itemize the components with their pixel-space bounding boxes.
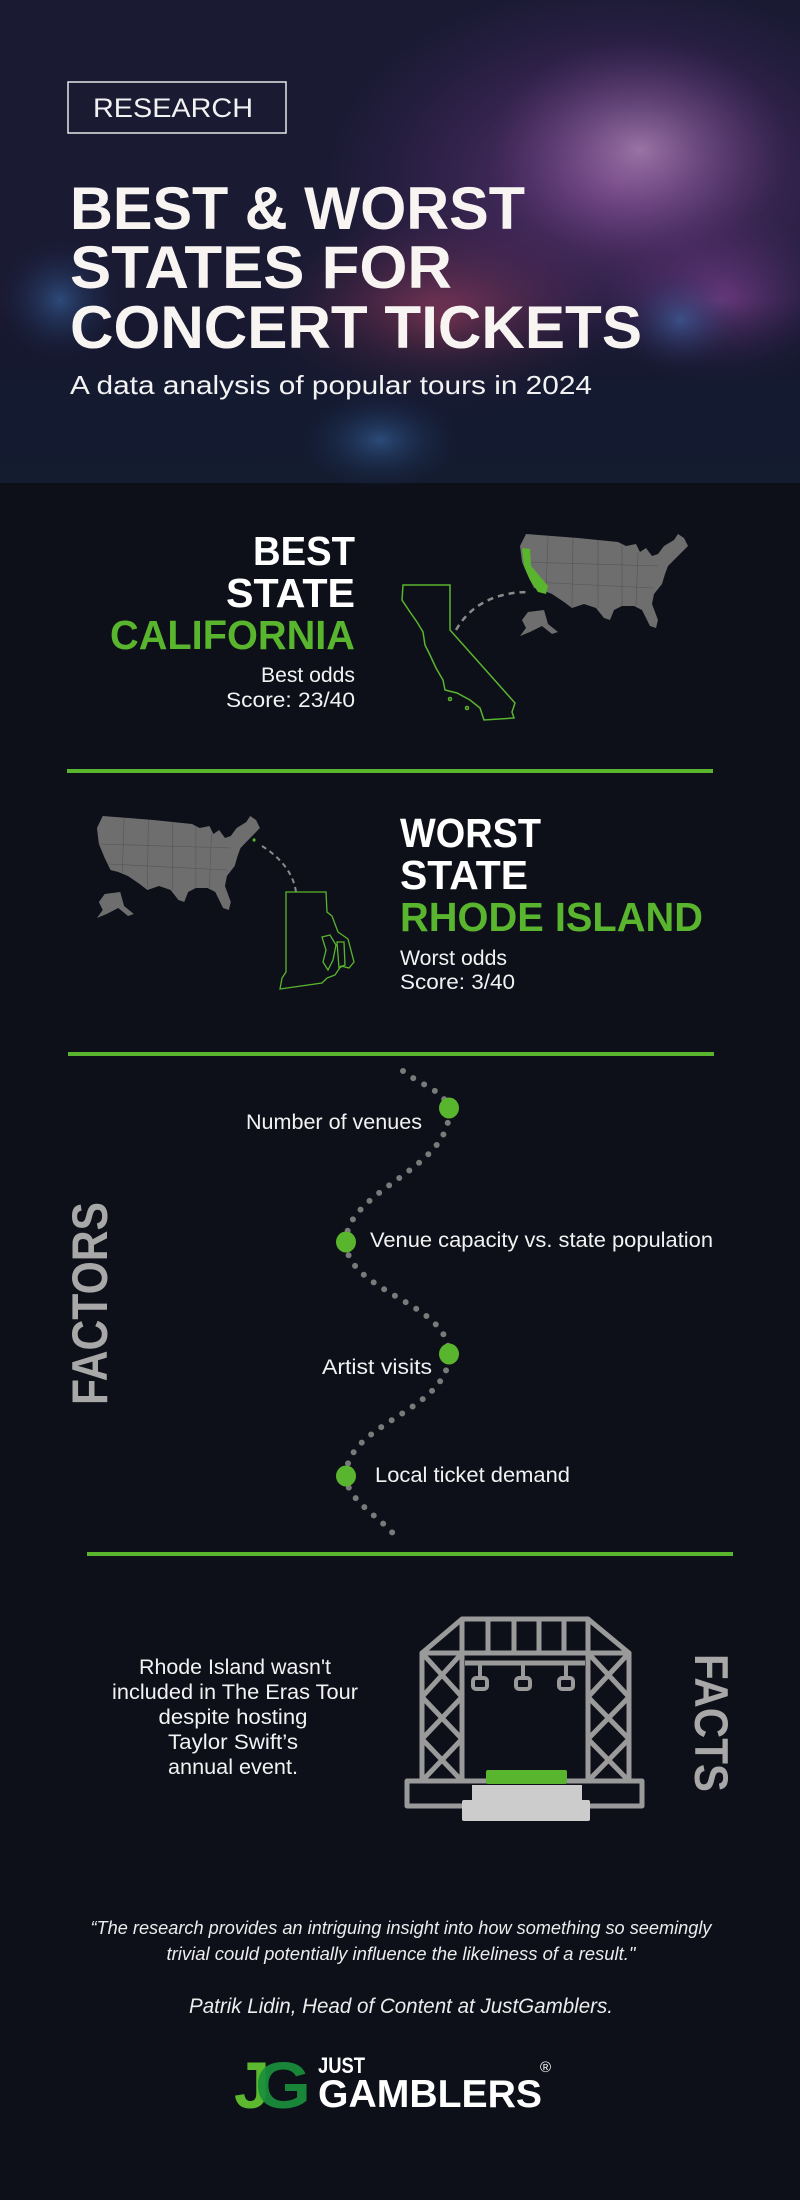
worst state heading: WORST [400,810,541,856]
subtitle: A data analysis of popular tours in 2024 [70,370,592,400]
best state heading: BEST [253,528,355,574]
factor labels: Local ticket demand [375,1464,570,1487]
worst state details: Worst odds [400,947,507,970]
worst state heading: STATE [400,852,528,898]
dot: artist visits [439,1344,459,1364]
factor labels: Number of venues [246,1111,422,1134]
arrow: dashed link rhode island [262,846,296,892]
best state details [226,664,355,712]
dot: number of venues [439,1098,459,1118]
quote: trivial could potentially influence the likeliness of a result." [166,1944,637,1964]
fact text: despite hosting [158,1706,308,1729]
icon: california outline [402,585,515,720]
title: BEST & WORST [70,175,525,242]
icon: us map worst [97,816,260,918]
logo [234,2048,551,2122]
factor labels [246,1111,713,1487]
logo wordmark: GAMBLERS [318,2073,542,2116]
best state heading: CALIFORNIA [110,612,355,658]
title: CONCERT TICKETS [70,294,642,361]
icon: rhode island outline [280,892,354,989]
quote author: Patrik Lidin, Head of Content at JustGamblers. [189,1995,613,2018]
facts heading: FACTS [685,1654,738,1792]
fact text: Taylor Swift’s [168,1731,298,1754]
factor labels: Artist visits [322,1356,432,1379]
logo wordmark: ® [540,2059,551,2076]
dot: venue capacity [336,1232,356,1252]
divider 1 [67,769,713,773]
title [70,175,642,361]
dot: local ticket demand [336,1466,356,1486]
quote: “The research provides an intriguing insight into how something so seemingly [90,1918,713,1938]
fact text: annual event. [168,1756,298,1779]
research tag [68,82,286,133]
divider 2 [68,1052,714,1056]
fact text: included in The Eras Tour [112,1681,358,1704]
best state details: Score: 23/40 [226,689,355,712]
worst state details [400,947,515,994]
logo mark: JG [234,2048,311,2122]
factors dotted path [336,1071,459,1537]
icon: us map best [520,534,688,636]
best state heading [110,528,355,658]
worst state heading: RHODE ISLAND [400,894,703,940]
worst state details: Score: 3/40 [400,971,515,994]
fact text [112,1656,358,1779]
research tag: RESEARCH [93,93,253,123]
title: STATES FOR [70,234,452,301]
worst state heading [400,810,703,940]
fact text: Rhode Island wasn't [139,1656,331,1679]
arrow: dashed link california [456,592,530,630]
icon: concert stage [407,1619,642,1821]
divider 3 [87,1552,733,1556]
factors heading: FACTORS [62,1202,118,1405]
logo mark: JG: G [255,2048,311,2122]
logo wordmark [318,2053,551,2116]
quote [90,1918,713,1964]
best state heading: STATE [226,570,355,616]
best state details: Best odds [261,664,355,687]
factor labels: Venue capacity vs. state population [370,1229,713,1252]
logo mark: JG: J [234,2048,270,2122]
hero background [0,0,800,490]
logo wordmark: JUST [318,2053,365,2078]
